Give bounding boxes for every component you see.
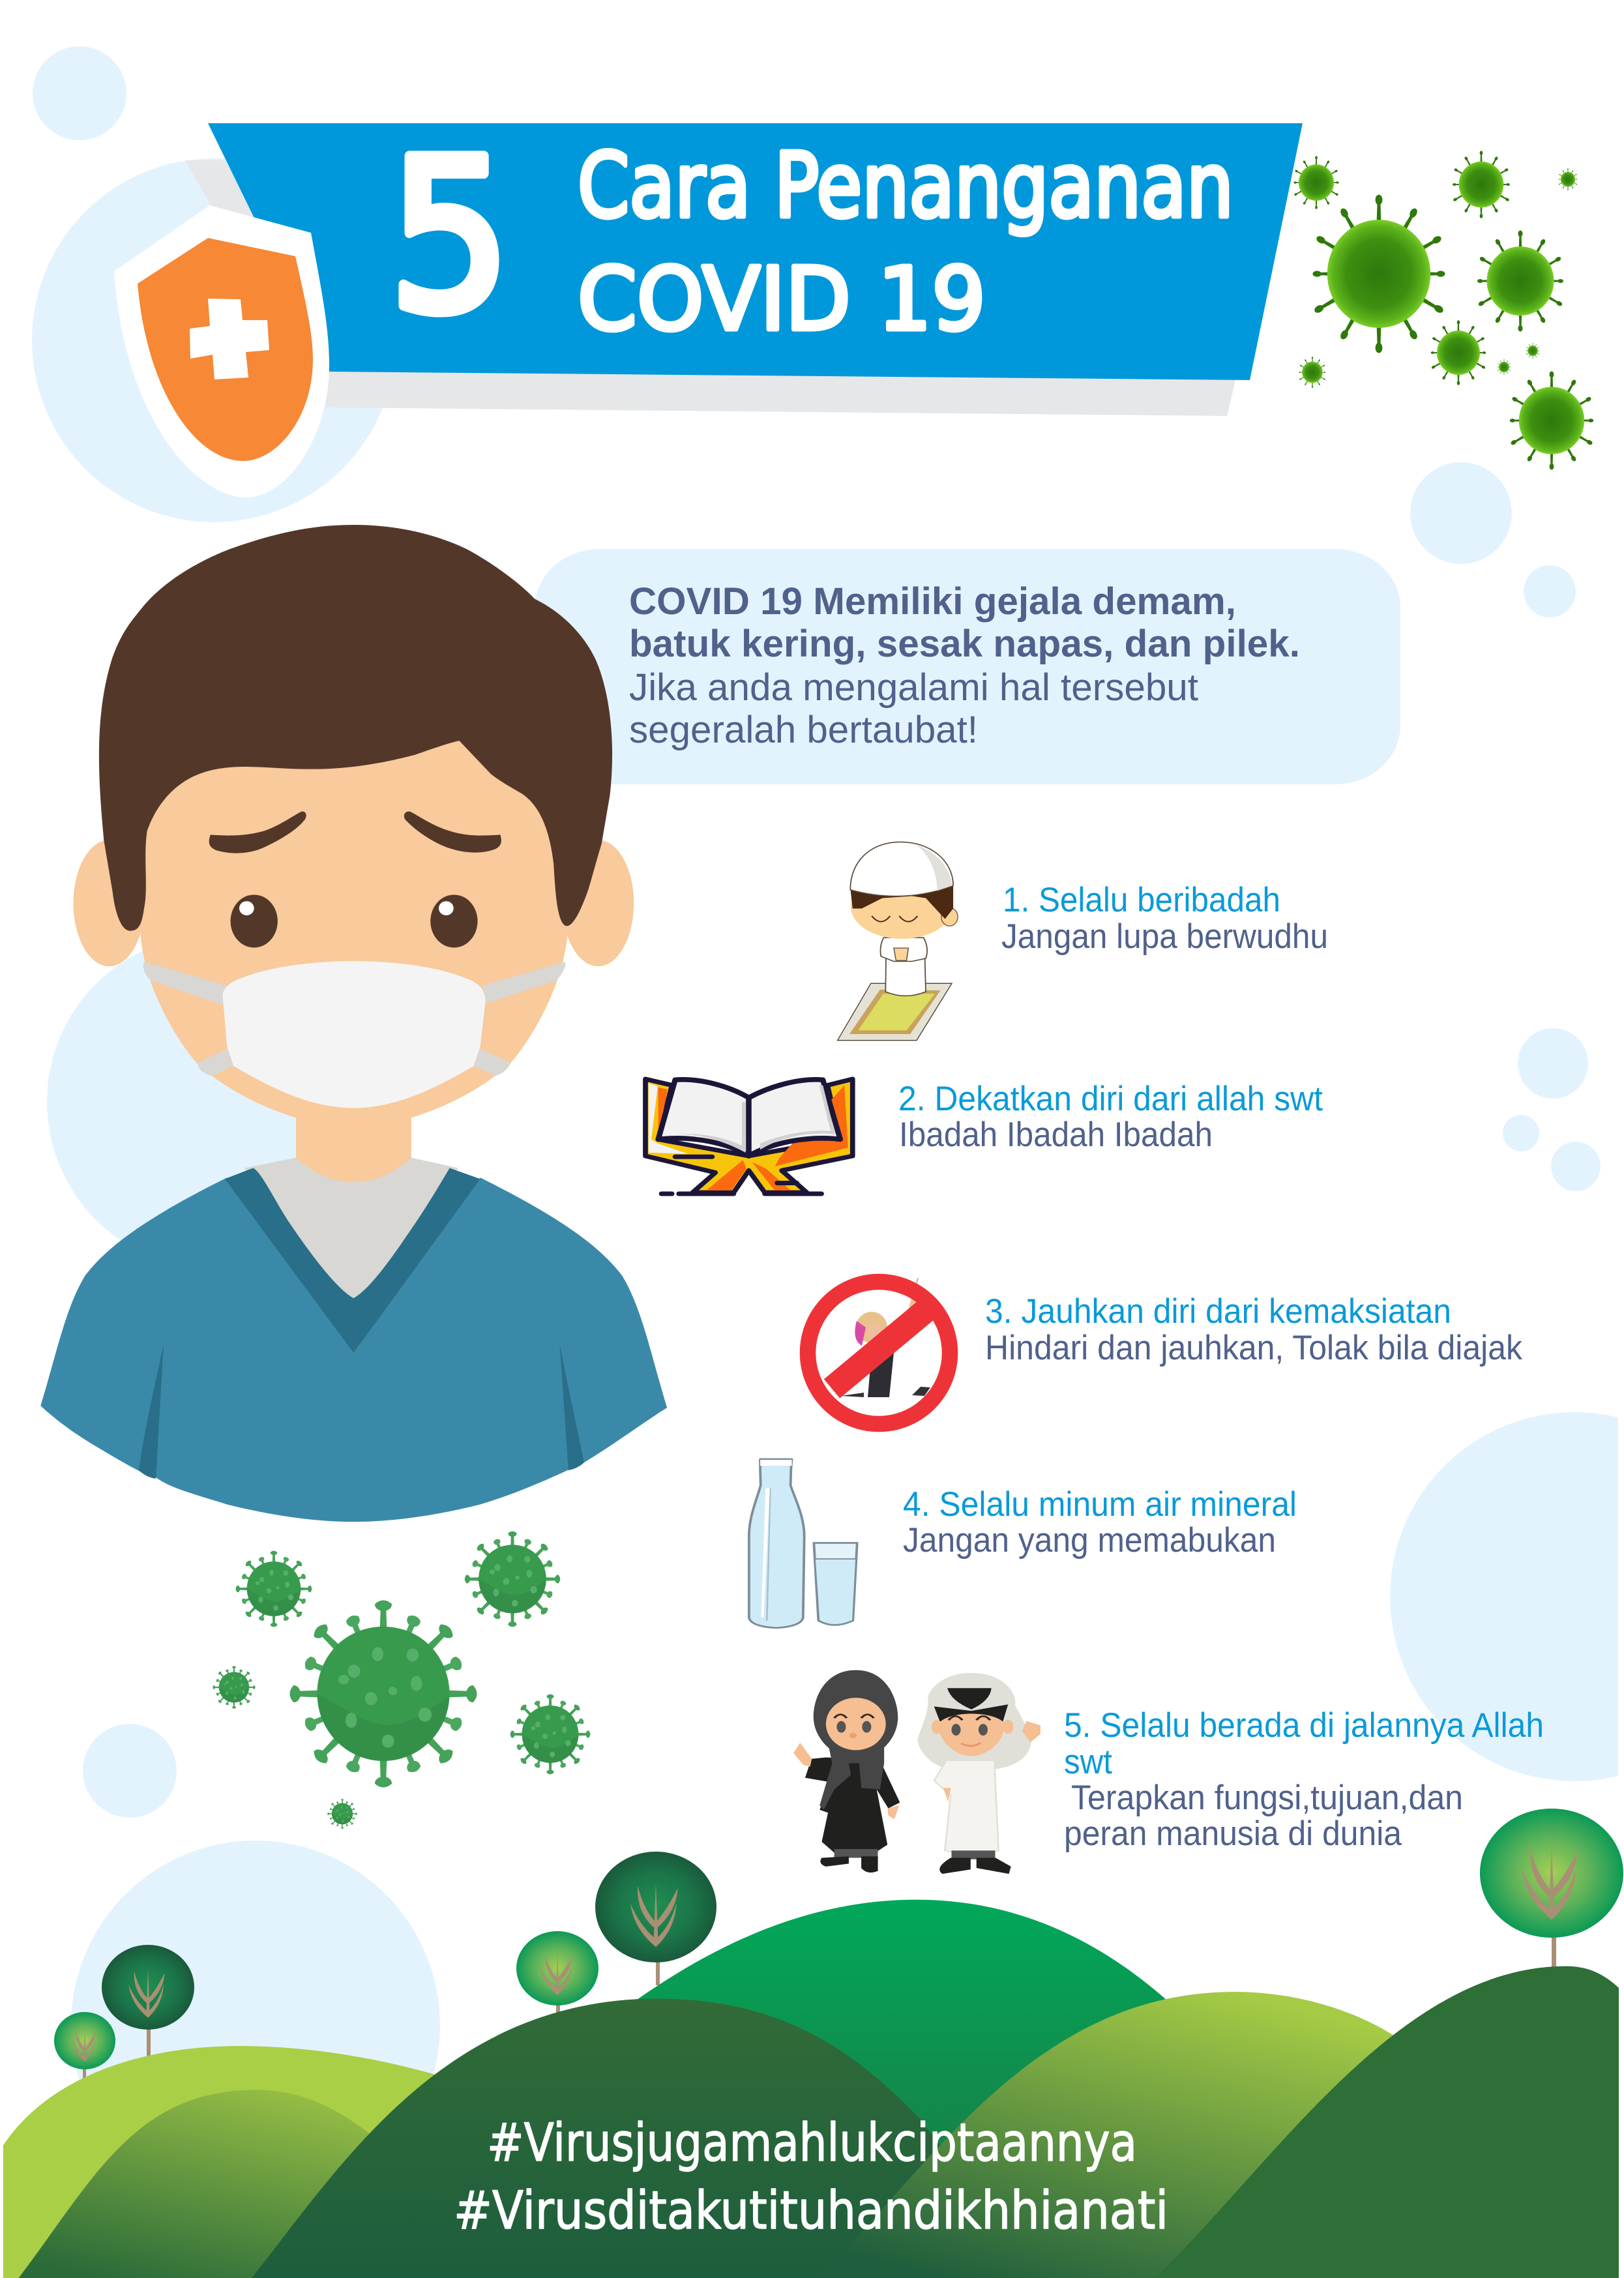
item 5 text: Terapkan fungsi,tujuan,dan bbox=[1071, 1779, 1463, 1817]
bottle bbox=[749, 1459, 805, 1628]
glass bbox=[814, 1543, 857, 1625]
boy bbox=[917, 1673, 1041, 1874]
icon: green viruses top right bbox=[1293, 151, 1593, 470]
book pages bbox=[658, 1080, 749, 1156]
icon: prohibited sign over dancer bbox=[808, 1278, 950, 1424]
head bbox=[851, 874, 953, 939]
item 1 text: 1. Selalu beribadah bbox=[1003, 881, 1280, 919]
icon: prayer boy bbox=[838, 842, 958, 1041]
item 3 text: 3. Jauhkan diri dari kemaksiatan bbox=[985, 1292, 1451, 1331]
item 4 text: 4. Selalu minum air mineral bbox=[903, 1485, 1297, 1524]
green hills bbox=[3, 1900, 1619, 2278]
shirt bbox=[40, 1177, 667, 1522]
hair bbox=[850, 883, 953, 919]
icon: open quran bbox=[645, 1079, 853, 1194]
ground marks bbox=[662, 1157, 821, 1194]
robe bbox=[885, 958, 926, 996]
symptoms text: batuk kering, sesak napas, dan pilek. bbox=[629, 623, 1300, 665]
neck bbox=[296, 1102, 411, 1182]
title line 2: COVID 19 bbox=[578, 250, 986, 350]
icon: water bottle and glass bbox=[749, 1459, 857, 1628]
item 4 text: Jangan yang memabukan bbox=[903, 1521, 1276, 1560]
hair bbox=[99, 525, 612, 931]
mask straps bbox=[143, 962, 565, 1076]
ears bbox=[73, 840, 145, 966]
dancer bbox=[868, 1346, 894, 1397]
symptoms text: Jika anda mengalami hal tersebut bbox=[629, 666, 1198, 709]
hashtags bbox=[454, 2112, 1168, 2241]
item 5 text: peran manusia di dunia bbox=[1064, 1814, 1402, 1853]
shirt folds bbox=[139, 1343, 164, 1479]
hashtags: #Virusjugamahlukciptaannya bbox=[487, 2112, 1137, 2173]
item 4 text bbox=[903, 1485, 1297, 1560]
title line 1: Cara Penanganan bbox=[578, 134, 1233, 238]
title banner shadow bbox=[185, 160, 1235, 416]
item 3 text bbox=[985, 1292, 1522, 1367]
icon: shield with cross bbox=[114, 205, 329, 497]
icon: muslim girl and boy bbox=[793, 1670, 1041, 1874]
undershirt bbox=[244, 1158, 458, 1321]
man with mask bbox=[40, 525, 667, 1522]
closed eyes bbox=[872, 916, 917, 922]
eyes bbox=[231, 895, 278, 947]
title banner bbox=[208, 114, 1303, 380]
symptoms text: COVID 19 Memiliki gejala demam, bbox=[629, 580, 1236, 623]
title number 5: 5 bbox=[389, 114, 511, 359]
item 2 text: 2. Dekatkan diri dari allah swt bbox=[898, 1080, 1323, 1118]
eyebrows bbox=[209, 812, 306, 853]
item 5 text: 5. Selalu berada di jalannya Allah bbox=[1064, 1706, 1544, 1745]
icon: green coronaviruses bbox=[213, 1531, 590, 1829]
collar bbox=[225, 1168, 480, 1353]
symptoms text: segeralah bertaubat! bbox=[629, 709, 978, 751]
item 5 text bbox=[1064, 1706, 1544, 1853]
item 2 text bbox=[898, 1080, 1323, 1154]
symptoms text bbox=[629, 580, 1300, 751]
book stand bbox=[645, 1079, 853, 1192]
face bbox=[141, 715, 567, 1123]
mask bbox=[222, 961, 486, 1108]
prayer mat bbox=[838, 983, 952, 1041]
item 1 text bbox=[1001, 881, 1328, 956]
girl bbox=[793, 1670, 900, 1872]
item 1 text: Jangan lupa berwudhu bbox=[1001, 917, 1328, 956]
item 3 text: Hindari dan jauhkan, Tolak bila diajak bbox=[985, 1329, 1522, 1367]
item 5 text: swt bbox=[1064, 1743, 1112, 1781]
hashtags: #Virusditakutituhandikhhianati bbox=[454, 2180, 1168, 2241]
item 2 text: Ibadah Ibadah Ibadah bbox=[899, 1116, 1213, 1154]
cap bbox=[850, 842, 953, 896]
trees bbox=[54, 1809, 1623, 2080]
speech bubble panel bbox=[535, 549, 1400, 784]
